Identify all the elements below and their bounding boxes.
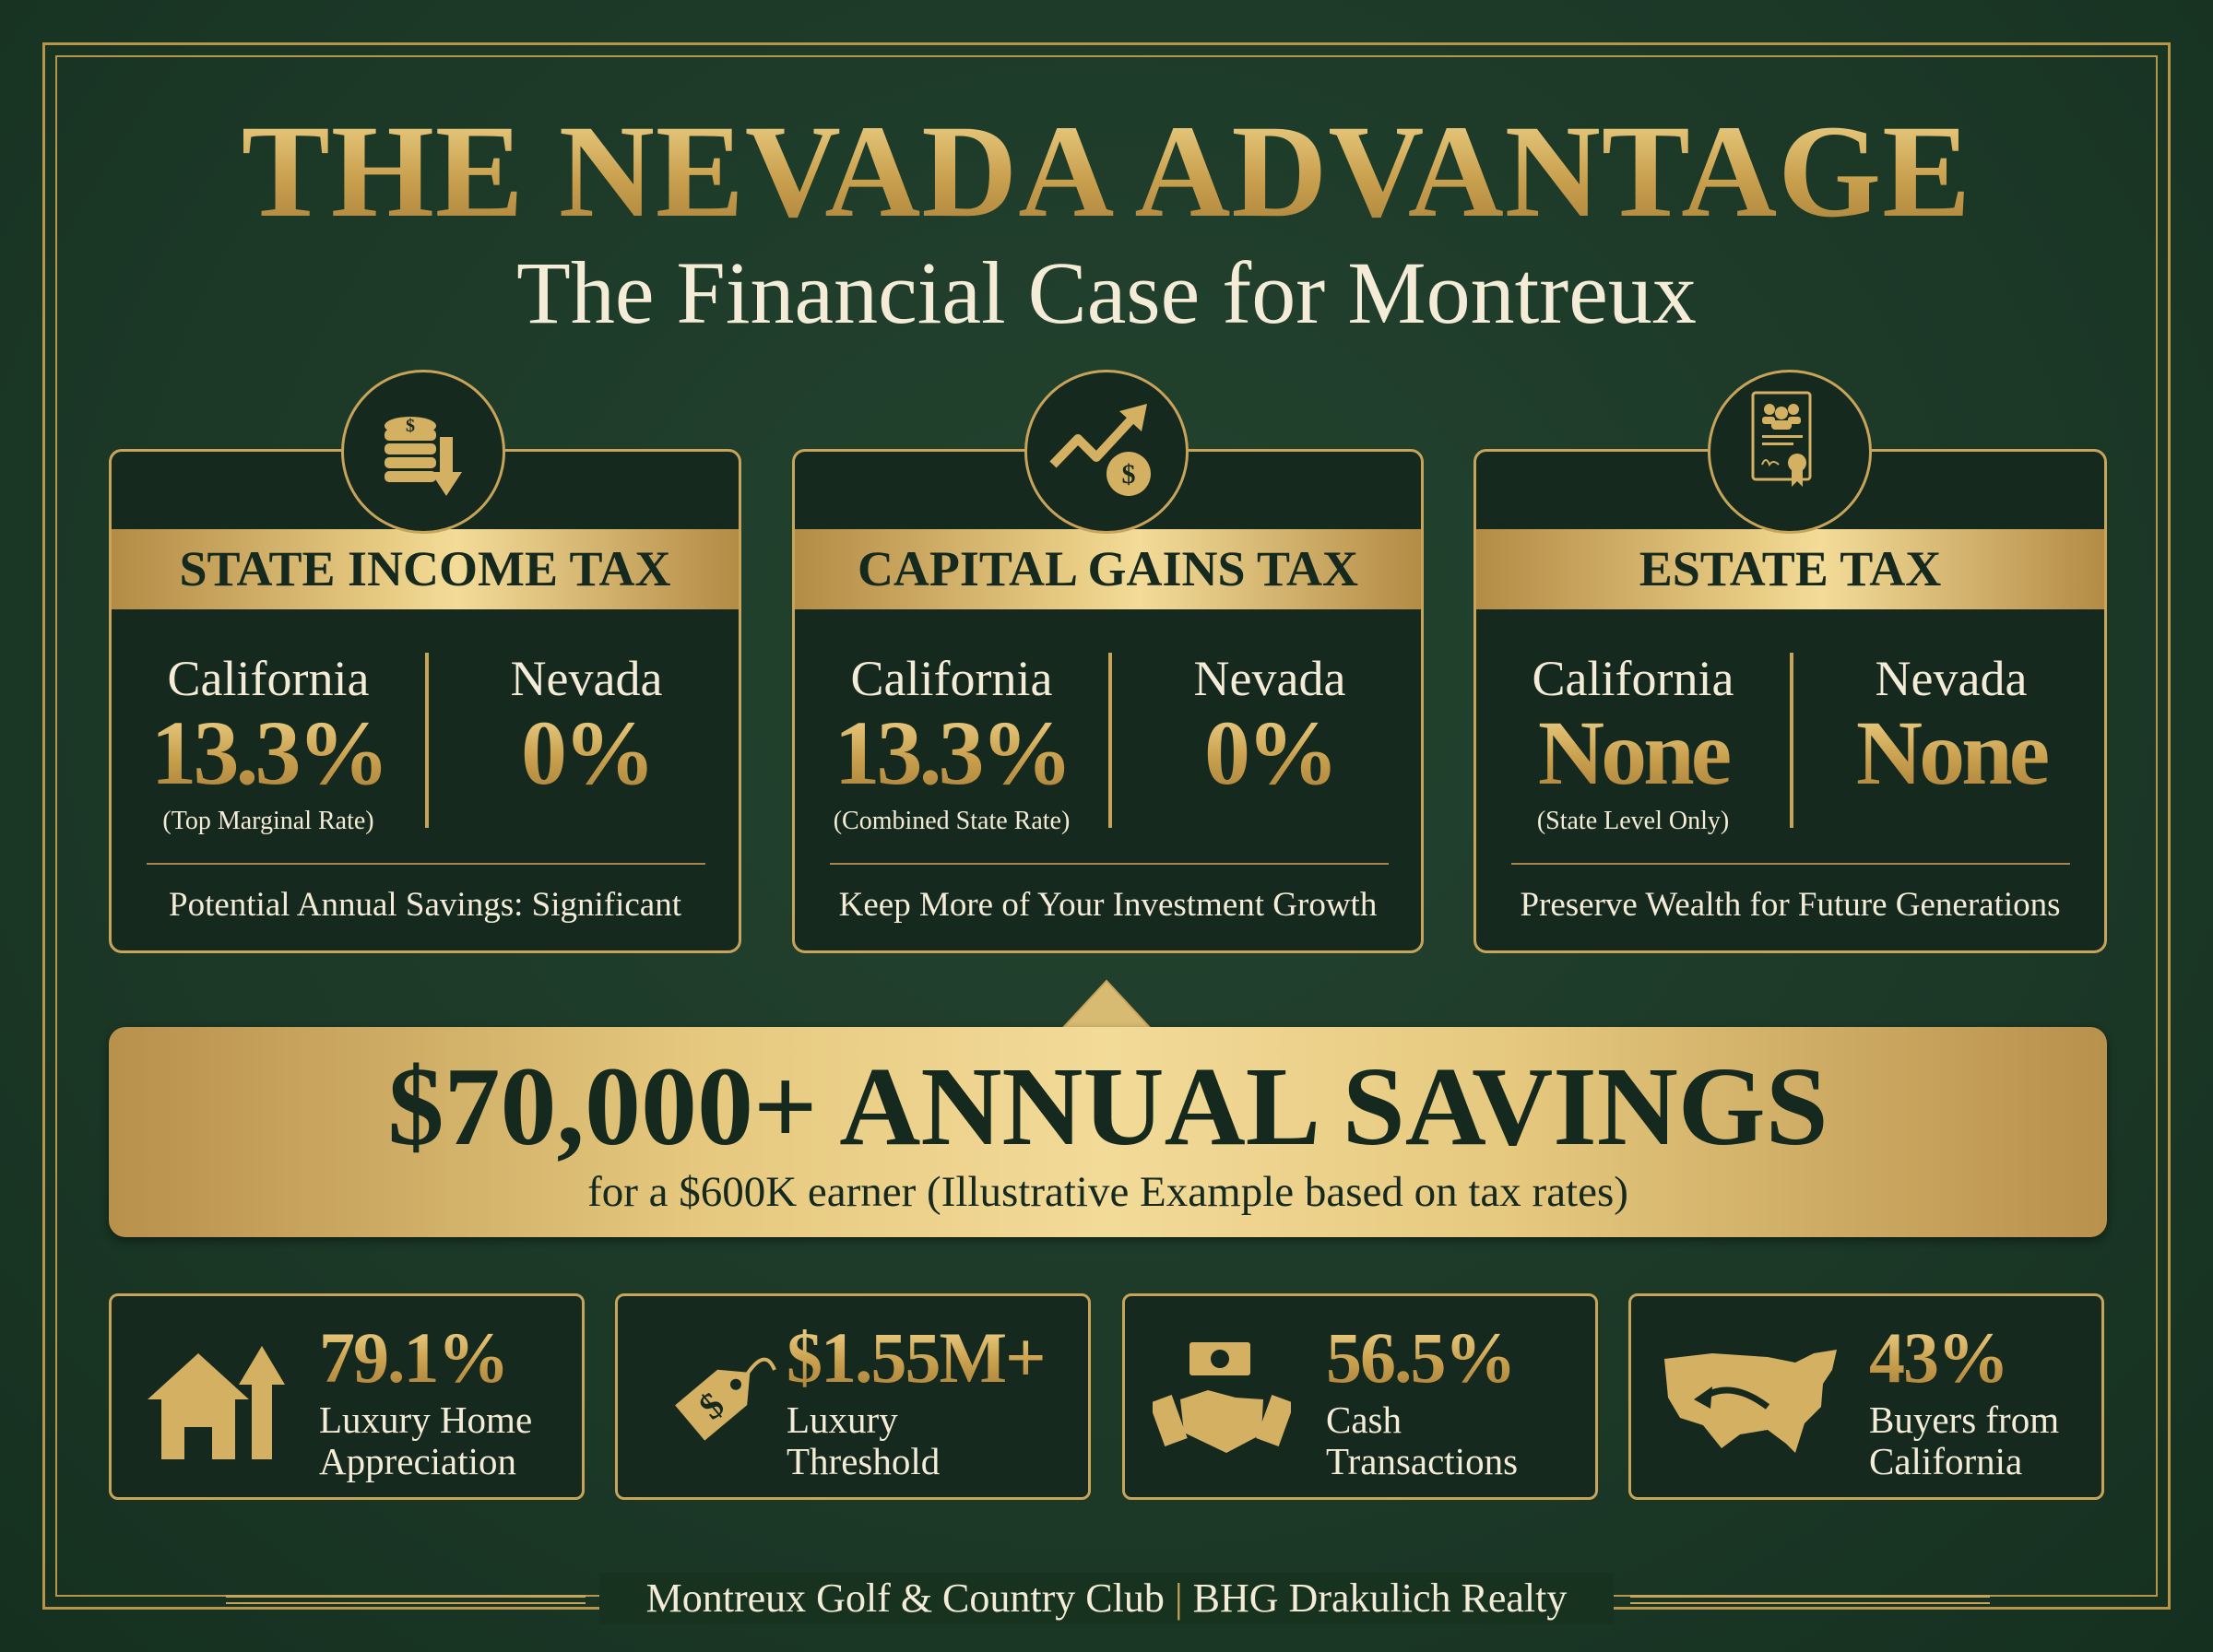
california column: None <box>1538 702 1728 804</box>
icon: price tag <box>675 1357 776 1441</box>
california column: (Combined State Rate) <box>834 807 1070 835</box>
savings note: Potential Annual Savings: Significant <box>169 886 681 924</box>
banner: estate tax <box>1476 529 2104 609</box>
icon: house arrow <box>148 1346 285 1459</box>
icon: coins <box>341 370 505 534</box>
arrow: pointer to savings banner <box>1062 979 1151 1027</box>
stat: luxury threshold <box>615 1293 1091 1500</box>
stat: cash transactions <box>1122 1293 1598 1500</box>
panel: state income tax <box>109 449 741 953</box>
icon: handshake cash <box>1153 1342 1291 1453</box>
banner: state income tax <box>112 529 739 609</box>
stat: luxury threshold: Luxury <box>787 1398 898 1441</box>
banner: estate tax: ESTATE TAX <box>1639 541 1941 596</box>
icon: chart arrow dollar <box>1024 370 1189 534</box>
stat: california buyers <box>1628 1293 2104 1500</box>
growth note: Keep More of Your Investment Growth <box>839 886 1377 924</box>
california column: California <box>851 651 1052 706</box>
california column: California <box>1533 651 1734 706</box>
banner: state income tax: STATE INCOME TAX <box>179 541 671 596</box>
savings headline: $70,000+ ANNUAL SAVINGS <box>387 1044 1828 1169</box>
nevada column: Nevada <box>1194 651 1345 706</box>
stat: appreciation: Luxury Home <box>319 1398 532 1441</box>
california column: 13.3% <box>151 702 385 804</box>
stat: california buyers: 43% <box>1869 1317 2007 1398</box>
icon: price tag: $ <box>691 1384 732 1427</box>
california column: 13.3% <box>834 702 1070 804</box>
icon: estate document <box>1708 370 1872 534</box>
nevada column <box>1856 651 2048 804</box>
california column: (State Level Only) <box>1537 807 1729 835</box>
banner: capital gains: CAPITAL GAINS TAX <box>858 541 1358 596</box>
nevada column <box>1194 651 1345 804</box>
california column <box>151 651 385 835</box>
subtitle: The Financial Case for Montreux <box>516 243 1697 342</box>
california column: (Top Marginal Rate) <box>162 807 374 835</box>
footer <box>226 1575 1990 1621</box>
stat: luxury threshold: Threshold <box>787 1440 940 1482</box>
california column <box>1533 651 1734 835</box>
stat: california buyers: Buyers from <box>1869 1398 2059 1441</box>
nevada column: Nevada <box>511 651 662 706</box>
title: THE NEVADA ADVANTAGE <box>242 99 1971 245</box>
stat: cash transactions: Cash <box>1326 1398 1402 1441</box>
icon: US map arrow <box>1664 1350 1837 1453</box>
nevada column: Nevada <box>1876 651 2027 706</box>
panel: capital gains tax <box>792 449 1424 953</box>
stat: appreciation: 79.1% <box>319 1317 507 1398</box>
stat: cash transactions: 56.5% <box>1326 1317 1514 1398</box>
savings subtext: for a $600K earner (Illustrative Example based on tax rates) <box>587 1168 1628 1216</box>
stat: luxury threshold: $1.55M+ <box>787 1317 1045 1398</box>
california column <box>834 651 1070 835</box>
stat: california buyers: California <box>1869 1440 2022 1482</box>
wealth note: Preserve Wealth for Future Generations <box>1520 886 2061 924</box>
stat: appreciation <box>109 1293 585 1500</box>
stat: cash transactions: Transactions <box>1326 1440 1518 1482</box>
banner: capital gains <box>795 529 1421 609</box>
nevada column <box>511 651 662 804</box>
stat: appreciation: Appreciation <box>319 1440 516 1482</box>
icon: coins: $ <box>406 416 415 436</box>
footer: Montreux Golf & Country Club | BHG Drakulich Realty <box>646 1575 1567 1621</box>
california column: California <box>168 651 369 706</box>
callout: annual savings <box>109 1027 2107 1237</box>
nevada column: 0% <box>1204 702 1335 804</box>
nevada column: 0% <box>521 702 652 804</box>
panel: estate tax <box>1473 449 2107 953</box>
nevada column: None <box>1856 702 2046 804</box>
icon: chart arrow dollar: $ <box>1121 459 1136 490</box>
